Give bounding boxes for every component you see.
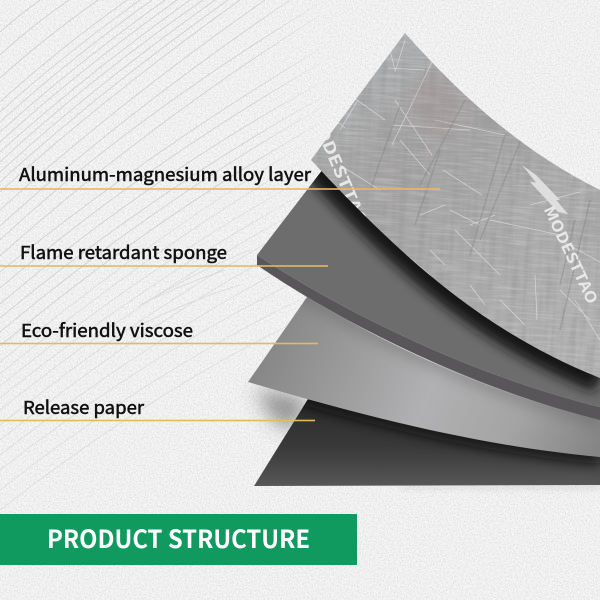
layer: flame retardant sponge (257, 160, 600, 420)
layer: aluminum-magnesium alloy foil (311, 33, 600, 378)
logo mark on foil (522, 165, 568, 214)
callout: Release paper: Release paper (23, 394, 145, 420)
callout: Aluminum-magnesium alloy layer: Aluminum-magnesium alloy layer (19, 161, 312, 187)
layer: eco-friendly viscose (248, 297, 600, 457)
banner: product structure (0, 514, 357, 565)
banner: product structure: PRODUCT STRUCTURE (47, 520, 310, 556)
brand text on foil: MODESTTAO (539, 202, 600, 307)
brand text on foil left edge: MODESTTAO (304, 106, 375, 230)
shadow along release paper bottom (400, 485, 600, 489)
layer: release paper (254, 399, 600, 486)
callout: Flame retardant sponge: Flame retardant sponge (20, 239, 227, 265)
callout: Eco-friendly viscose: Eco-friendly viscose (21, 317, 193, 343)
shadow under viscose corner (255, 388, 310, 432)
